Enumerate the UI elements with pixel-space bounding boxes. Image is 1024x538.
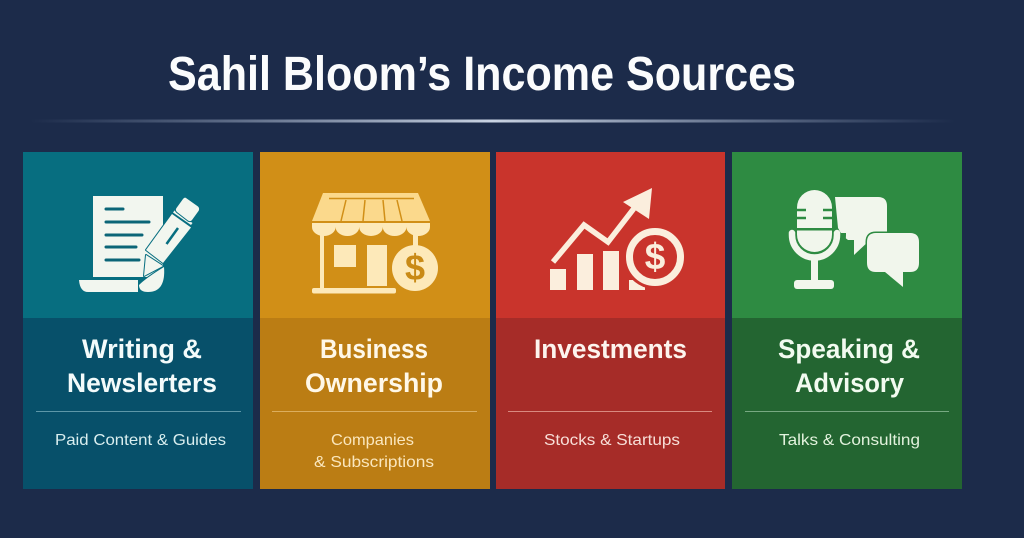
heading: writing and newsletters: Newslerters: [67, 368, 217, 398]
subtext: companies and subscriptions: Companies: [331, 432, 414, 449]
panel: writing and newsletters: [23, 152, 253, 489]
panel: business ownership: [260, 152, 490, 489]
subtext: companies and subscriptions: [314, 432, 434, 471]
title: Sahil Bloom’s Income Sources: [168, 48, 796, 101]
panel: speaking and advisory: [732, 152, 962, 489]
heading: investments: Investments: [534, 334, 687, 364]
heading: writing and newsletters: [67, 334, 217, 398]
icon: document and pencil: [79, 196, 199, 292]
icon: storefront with coin: $: [405, 247, 425, 288]
subtext: companies and subscriptions: & Subscriptions: [314, 454, 434, 471]
heading: business ownership: Business: [320, 334, 428, 364]
subtext: paid content and guides: Paid Content & Guides: [55, 432, 226, 449]
heading: writing and newsletters: Writing &: [82, 334, 202, 364]
heading: speaking and advisory: [778, 334, 920, 398]
subtext: stocks and startups: Stocks & Startups: [544, 432, 680, 449]
icon: growth chart with coin: [550, 188, 687, 290]
heading: business ownership: [305, 334, 443, 398]
icon: storefront with coin: [312, 193, 438, 294]
icon: growth chart with coin: $: [645, 236, 666, 277]
icon: microphone and speech bubbles: [789, 190, 919, 289]
heading: speaking and advisory: Speaking &: [778, 334, 920, 364]
heading: speaking and advisory: Advisory: [795, 368, 904, 398]
panel: investments: [496, 152, 725, 489]
heading: business ownership: Ownership: [305, 368, 443, 398]
subtext: talks and consulting: Talks & Consulting: [779, 432, 920, 449]
